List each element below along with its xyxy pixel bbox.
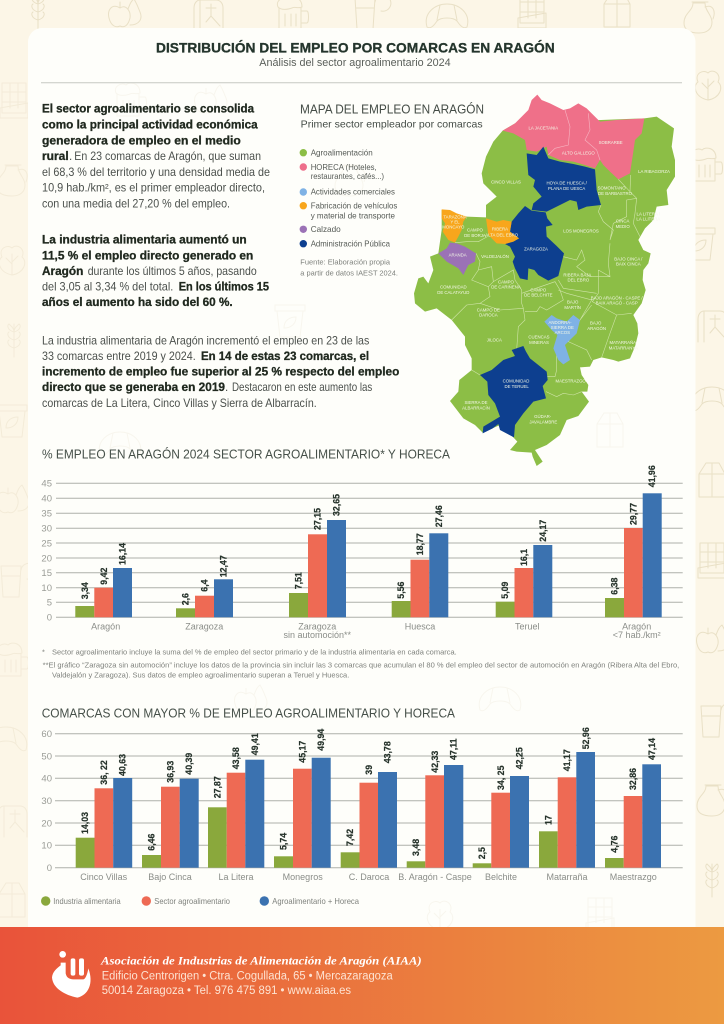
map source: [300, 257, 398, 277]
bars: C. Daroca: 7,42: [345, 829, 355, 846]
bars: Belchite: 42,25: [514, 747, 524, 769]
region: HORECA: [503, 95, 644, 179]
county labels: BAJO: [590, 321, 602, 326]
bars: Bajo Cinca: 6,46: [146, 833, 156, 851]
county labels: ARAGÓN: [587, 326, 606, 331]
legend: Sector agroalimentario: Sector agroalimentario: [154, 896, 230, 906]
county labels: SOBRARBE: [599, 140, 623, 145]
county labels: RIBERA: [492, 227, 508, 232]
footnotes: *: [42, 647, 45, 656]
county labels: SIERRA DE: [464, 400, 488, 405]
legend item: Fabricación: [300, 202, 397, 221]
bars: Bajo Cinca: 36,93: [166, 761, 176, 783]
association name: Asociación de Industrias de Alimentación de Aragón (AIAA): [100, 955, 422, 967]
legend item: Fabricación: y material de transporte: [311, 212, 395, 221]
bars: Aragón: 9,42: [99, 567, 109, 585]
bars: Aragón under 7 hab/km2: <7 hab./km²: [613, 630, 661, 640]
text block: food industry growth: La industria alimentaria aumentó un: [42, 233, 247, 247]
county labels: BAJO CINCA /: [614, 256, 643, 261]
y axis labels: [41, 729, 52, 874]
county labels: GÚDAR-: [534, 414, 552, 419]
bars: C. Daroca: 43,78: [382, 741, 392, 763]
bars: Zaragoza sin automoción: 27,15: [312, 508, 322, 530]
bars: Cinco Villas: Cinco Villas: [80, 872, 128, 882]
bars: Monegros: Monegros: [283, 872, 323, 882]
bars: Zaragoza sin automoción: sin automoción**: [284, 630, 352, 640]
heading: chart 1: % EMPLEO EN ARAGÓN 2024 SECTOR AGROALIMENTARIO* Y HORECA: [42, 446, 450, 461]
text block: sector consolidation: En 23 comarcas de Aragón, que suman: [74, 150, 261, 163]
county labels: Y EL: [450, 220, 460, 225]
bars: La Litera: [208, 733, 264, 882]
bars: Matarraña: Matarraña: [546, 872, 588, 882]
y axis labels: 30: [41, 524, 52, 535]
text block: food industry growth: [42, 233, 269, 309]
county labels: MAESTRAZGO: [556, 379, 586, 384]
county labels: BAIX ARAGÓ - CASP: [596, 301, 638, 306]
bars: Huesca: 18,77: [415, 533, 425, 555]
county labels: CAMPO: [467, 228, 484, 233]
county labels: MONCAYO: [442, 225, 465, 230]
county labels: LA LITERA /: [637, 211, 661, 216]
region: Zaragoza, administración pública: [505, 206, 564, 281]
bars: Aragón: 16,14: [118, 543, 128, 565]
y axis labels: 30: [41, 796, 52, 807]
bars: Monegros: 49,94: [316, 729, 326, 751]
legend item: HORECA: restaurantes, cafés...): [311, 172, 384, 181]
bars: Zaragoza: [176, 555, 233, 631]
text block: food industry growth: 11,5 % el empleo directo generado en: [42, 248, 253, 262]
y axis labels: 50: [41, 751, 52, 762]
county labels: ALBARRACÍN: [462, 405, 490, 410]
county labels: CAMPO: [530, 287, 547, 292]
bars: Aragón under 7 hab/km2: Aragón: [622, 621, 651, 631]
bars: Maestrazgo: 32,86: [628, 768, 638, 790]
text block: food industry growth: En los últimos 15: [179, 280, 269, 294]
y axis labels: 20: [41, 553, 52, 564]
text block: food industry growth: del 3,05 al 3,34 % del total.: [42, 281, 173, 294]
county labels: PLANA DE UESCA: [548, 186, 585, 191]
county labels: [437, 126, 670, 424]
bars: Aragón under 7 hab/km2: 6,38: [610, 577, 620, 595]
bars: La Litera: 43,58: [231, 747, 241, 769]
footnotes: Valdejalón y Zaragoza). Sus datos de empleo agroalimentario superan a Teruel y Huesca.: [52, 671, 349, 680]
address: Edificio Centrorigen • Ctra. Cogullada, 65 • Mercazaragoza: [102, 970, 393, 982]
y axis labels: 0: [47, 863, 52, 874]
county labels: ANDORRA-: [548, 320, 572, 325]
map source: Fuente: Elaboración propia: [300, 257, 391, 266]
county labels: ARCOS: [555, 330, 570, 335]
county labels: LA RIBAGORZA: [638, 169, 670, 174]
text block: counties growth: directo que se generaba en 2019: [42, 380, 225, 394]
county labels: SOMONTANO: [598, 186, 626, 191]
county labels: DAROCA: [479, 312, 498, 317]
bars: La Litera: 49,41: [250, 733, 260, 755]
county labels: RIBERA BAJA: [563, 272, 591, 277]
county labels: MINERAS: [529, 340, 549, 345]
bars: Huesca: Huesca: [405, 621, 435, 631]
text block: counties growth: La industria alimentaria de Aragón incrementó el empleo en 23 de las: [42, 334, 369, 347]
bars: B. Aragón - Caspe: B. Aragón - Caspe: [398, 872, 472, 882]
y axis labels: 40: [41, 774, 52, 785]
footnotes: [42, 647, 679, 680]
county labels: MATARRANYA: [609, 345, 638, 350]
map heading: MAPA DEL EMPLEO EN ARAGÓN: [300, 101, 484, 116]
county labels: MATARRAÑA/: [609, 340, 638, 345]
icon: AIAA logo: [52, 951, 91, 998]
y axis labels: 20: [41, 818, 52, 829]
text block: counties growth: [42, 334, 399, 410]
y axis labels: [41, 479, 52, 624]
text block: food industry growth: Aragón: [42, 264, 83, 278]
y axis labels: 10: [41, 583, 52, 594]
bars: C. Daroca: 39: [364, 765, 374, 775]
y axis labels: 25: [41, 538, 52, 549]
region: Ribera Alta, fabricación: [486, 218, 519, 244]
county labels: COMUNIDAD: [440, 285, 467, 290]
legend item: HORECA: HORECA (Hoteles,: [311, 163, 377, 172]
map heading: Primer sector empleador por comarcas: [301, 118, 483, 130]
bars: Zaragoza: 2,6: [180, 593, 190, 605]
bars: C. Daroca: C. Daroca: [349, 872, 389, 882]
county labels: DE BELCHITE: [524, 292, 553, 297]
region: Aranda, calzado: [438, 243, 476, 275]
footnotes: Sector agroalimentario incluye la suma del % de empleo del sector primario y de la industria alimentaria en cada comarca.: [52, 647, 457, 656]
text block: sector consolidation: 10,9 hab./km², es el primer empleador directo,: [42, 182, 265, 195]
county labels: LA LLITERA: [636, 217, 660, 222]
county labels: ALTO GALLEGO: [562, 151, 595, 156]
county labels: VALDEJALÓN: [481, 254, 509, 259]
bars: Bajo Cinca: [142, 753, 199, 882]
legend item: Administración Pública: Administración Pública: [311, 240, 390, 248]
region: Teruel, administración pública: [480, 346, 548, 437]
text block: sector consolidation: el 68,3 % del territorio y una densidad media de: [42, 166, 270, 179]
heading: chart 2: COMARCAS CON MAYOR % DE EMPLEO AGROALIMENTARIO Y HORECA: [42, 705, 455, 720]
bars: Maestrazgo: 47,14: [647, 738, 657, 760]
county labels: MEDIO: [616, 224, 630, 229]
county labels: LA JACETANIA: [528, 126, 558, 131]
bars: Aragón: Aragón: [91, 621, 120, 631]
bars: Zaragoza: 6,4: [200, 579, 210, 592]
county labels: CINCA: [616, 219, 630, 224]
bars: Zaragoza sin automoción: 7,51: [294, 572, 304, 589]
text block: sector consolidation: rural: [42, 149, 69, 163]
bars: Aragón under 7 hab/km2: 29,77: [628, 503, 638, 525]
bars: Maestrazgo: 4,76: [610, 835, 620, 853]
bar chart: counties: [41, 727, 683, 882]
bars: Cinco Villas: [76, 754, 132, 882]
text block: counties growth: 33 comarcas entre 2019 y 2024.: [42, 350, 196, 363]
map heading: [300, 101, 484, 130]
region: Andorra, actividades comerciales: [544, 315, 580, 364]
y axis labels: 15: [41, 568, 52, 579]
bars: Teruel: 5,09: [500, 581, 510, 599]
map of Aragón: [414, 95, 675, 466]
legend item: HORECA: [300, 163, 384, 181]
county labels: CAMPO: [498, 280, 515, 285]
bars: Matarraña: 41,17: [562, 749, 572, 771]
county labels: BAJO ARAGÓN - CASPE /: [591, 295, 643, 300]
text block: counties growth: incremento de empleo fue superior al 25 % respecto del empleo: [42, 365, 399, 379]
title block: [156, 41, 555, 69]
text block: food industry growth: durante los últimos 5 años, pasando: [88, 265, 257, 278]
bars: Belchite: [473, 747, 529, 882]
county labels: DEL EBRO: [567, 278, 590, 283]
county labels: ALTA DEL EBRO: [485, 232, 519, 237]
region: Hoya de Huesca, administración pública: [527, 147, 601, 212]
text block: sector consolidation: generadora de empleo en el medio: [42, 134, 241, 148]
y axis labels: 45: [41, 479, 52, 490]
bars: Aragón under 7 hab/km2: 41,96: [647, 465, 657, 487]
bars: Monegros: 45,17: [298, 741, 308, 763]
bars: B. Aragón - Caspe: 3,48: [411, 839, 421, 856]
bars: La Litera: 27,87: [212, 776, 222, 798]
county labels: DE TERUEL: [505, 384, 529, 389]
text block: sector consolidation: con una media del 27,20 % del empleo.: [42, 198, 230, 211]
bars: B. Aragón - Caspe: 47,11: [448, 738, 458, 760]
bars: Aragón: 3,34: [80, 582, 90, 599]
contact: 50014 Zaragoza • Tel. 976 475 891 • www.aiaa.es: [102, 985, 351, 997]
legend item: Actividades comerciales: Actividades comerciales: [311, 188, 395, 197]
bars: Maestrazgo: [605, 738, 661, 882]
y axis labels: 40: [41, 494, 52, 505]
title: DISTRIBUCIÓN DEL EMPLEO POR COMARCAS EN ARAGÓN: [156, 41, 555, 56]
county labels: DE CALATAYUD: [437, 290, 469, 295]
legend item: Calzado: Calzado: [311, 225, 341, 234]
y axis labels: 60: [41, 729, 52, 740]
bars: B. Aragón - Caspe: 42,33: [430, 751, 440, 773]
bars: Belchite: 2,5: [477, 847, 487, 859]
faint icons inside the panel: [99, 83, 623, 933]
county labels: DE CARIÑENA: [491, 285, 521, 290]
bars: Cinco Villas: 36, 22: [99, 760, 109, 785]
bars: Huesca: [392, 505, 448, 631]
bars: Zaragoza sin automoción: Zaragoza: [298, 621, 336, 631]
county labels: DE BORJA: [464, 233, 486, 238]
bars: Teruel: 24,17: [538, 520, 548, 542]
bars: Huesca: 27,46: [434, 505, 444, 527]
bars: Monegros: 5,74: [278, 833, 288, 850]
text block: counties growth: comarcas de La Litera, Cinco Villas y Sierra de Albarracín.: [42, 397, 317, 410]
bars: Bajo Cinca: Bajo Cinca: [148, 872, 192, 882]
bars: Matarraña: [539, 727, 595, 882]
county labels: JAVALAMBRE: [529, 419, 557, 424]
footnotes: **El gráfico “Zaragoza sin automoción” incluye los datos de la provincia sin incluir las 3 comarcas que acumulan el 80 % del empleo del sector de automoción en Aragón (Ribera Alta del Ebro,: [43, 660, 679, 669]
bars: La Litera: La Litera: [218, 872, 254, 882]
background pattern of food icons: left: [0, 83, 37, 917]
legend item: Fabricación: Fabricación de vehículos: [311, 202, 397, 210]
county labels: LOS MONEGROS: [563, 229, 599, 234]
county labels: JILOCA: [487, 338, 502, 343]
bars: Aragón under 7 hab/km2: [605, 465, 662, 640]
county boundaries: [452, 175, 640, 397]
y axis labels: 10: [41, 841, 52, 852]
bars: Teruel: [496, 520, 552, 631]
county labels: COMUNIDAD: [503, 379, 529, 384]
bars: Cinco Villas: 40,63: [118, 754, 128, 776]
county labels: BAJO: [567, 300, 579, 305]
bar chart: employment in Aragón: [41, 465, 683, 640]
county labels: ARANDA: [449, 252, 467, 257]
bars: Matarraña: 17: [544, 815, 554, 825]
bars: Huesca: 5,56: [396, 581, 406, 599]
bars: Teruel: Teruel: [515, 621, 540, 631]
county labels: TARAZONA: [443, 214, 467, 219]
county labels: CINCO VILLAS: [491, 180, 521, 185]
legend: Agroalimentario + Horeca: Agroalimentario + Horeca: [272, 896, 359, 906]
bars: Monegros: [274, 729, 331, 882]
bars: Cinco Villas: 14,03: [80, 812, 90, 834]
region: agroalimentación base: [414, 117, 675, 466]
bars: Matarraña: 52,96: [581, 727, 591, 749]
bars: Maestrazgo: Maestrazgo: [610, 872, 657, 882]
text block: sector consolidation: El sector agroalimentario se consolida: [42, 101, 254, 115]
county labels: MARTÍN: [564, 305, 581, 310]
map source: a partir de datos IAEST 2024.: [300, 268, 398, 277]
text block: counties growth: Destacaron en este aumento las: [232, 381, 372, 394]
bars: Teruel: 16,1: [519, 549, 529, 566]
chart legend: [41, 896, 359, 906]
region: Tarazona, fabricación: [442, 209, 467, 243]
text block: counties growth: En 14 de estas 23 comarcas, el: [201, 349, 369, 363]
bars: Aragón: [75, 543, 132, 631]
county labels: HOYA DE HUESCA /: [547, 181, 588, 186]
county labels: ZARAGOZA: [524, 247, 548, 252]
bars: Bajo Cinca: 40,39: [184, 753, 194, 775]
y axis labels: 0: [47, 613, 52, 624]
y axis labels: 5: [47, 598, 52, 609]
bars: Zaragoza: 12,47: [218, 555, 228, 577]
county labels: BAIX CINCA: [616, 261, 641, 266]
county labels: SIERRA DE: [551, 325, 574, 330]
legend item: Agroalimentación: Agroalimentación: [311, 148, 373, 158]
bars: C. Daroca: [341, 741, 397, 882]
text block: sector consolidation: .: [69, 150, 72, 163]
county labels: CUENCAS: [528, 335, 550, 340]
bars: Zaragoza sin automoción: 32,65: [332, 494, 342, 516]
subtitle: Análisis del sector agroalimentario 2024: [259, 57, 451, 69]
text block: sector consolidation: como la principal actividad económica: [42, 117, 258, 131]
text block: counties growth: .: [225, 381, 228, 394]
county labels: DE BARBASTRO: [598, 191, 633, 196]
bars: Belchite: 34, 25: [496, 765, 506, 790]
map legend: [300, 148, 398, 277]
legend: Industria alimentaria: Industria alimentaria: [53, 896, 121, 906]
text block: sector consolidation: [42, 101, 270, 211]
footer band: [0, 927, 724, 1024]
text block: food industry growth: años el aumento ha sido del 60 %.: [42, 295, 233, 309]
y axis labels: 35: [41, 509, 52, 520]
bars: Zaragoza: Zaragoza: [185, 621, 223, 631]
bars: Belchite: Belchite: [485, 872, 517, 882]
county labels: CAMPO DE: [477, 307, 500, 312]
bars: B. Aragón - Caspe: [398, 738, 472, 882]
bars: Zaragoza sin automoción: [284, 494, 352, 640]
